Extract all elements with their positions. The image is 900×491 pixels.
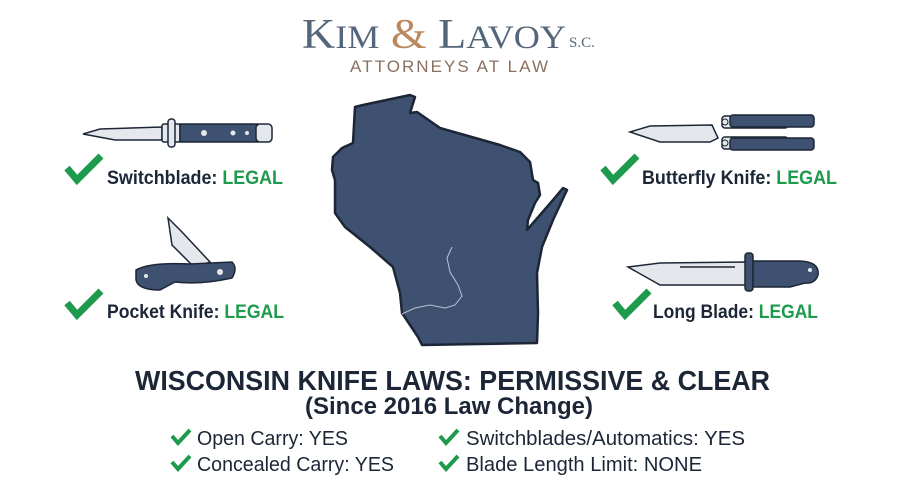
list: law facts: Concealed Carry: YES xyxy=(197,454,394,476)
icon: pocket knife xyxy=(136,218,235,290)
list: law facts xyxy=(172,428,745,476)
logo: KIM & LAVOY xyxy=(302,12,566,58)
label: butterfly knife: Butterfly Knife: LEGAL xyxy=(642,168,837,189)
list: law facts: Open Carry: YES xyxy=(197,428,348,450)
logo xyxy=(302,12,595,76)
label: pocket knife xyxy=(67,291,284,323)
label: pocket knife: Pocket Knife: LEGAL xyxy=(107,302,284,323)
list: law facts: Switchblades/Automatics: YES xyxy=(466,428,745,450)
logo: S.C. xyxy=(569,35,595,51)
list: law facts: Blade Length Limit: NONE xyxy=(466,454,702,476)
logo: ATTORNEYS AT LAW xyxy=(350,57,548,76)
label: long blade: Long Blade: LEGAL xyxy=(653,302,818,323)
icon: switchblade xyxy=(83,119,272,147)
title: WISCONSIN KNIFE LAWS: PERMISSIVE & CLEAR xyxy=(135,365,770,396)
label: switchblade: Switchblade: LEGAL xyxy=(107,168,283,189)
label: long blade xyxy=(615,291,818,323)
icon: long blade xyxy=(628,253,818,291)
label: switchblade xyxy=(67,156,283,189)
label: butterfly knife xyxy=(603,156,837,189)
map: Wisconsin xyxy=(332,95,567,345)
icon: butterfly knife xyxy=(630,115,814,150)
subtitle: (Since 2016 Law Change) xyxy=(305,393,593,420)
